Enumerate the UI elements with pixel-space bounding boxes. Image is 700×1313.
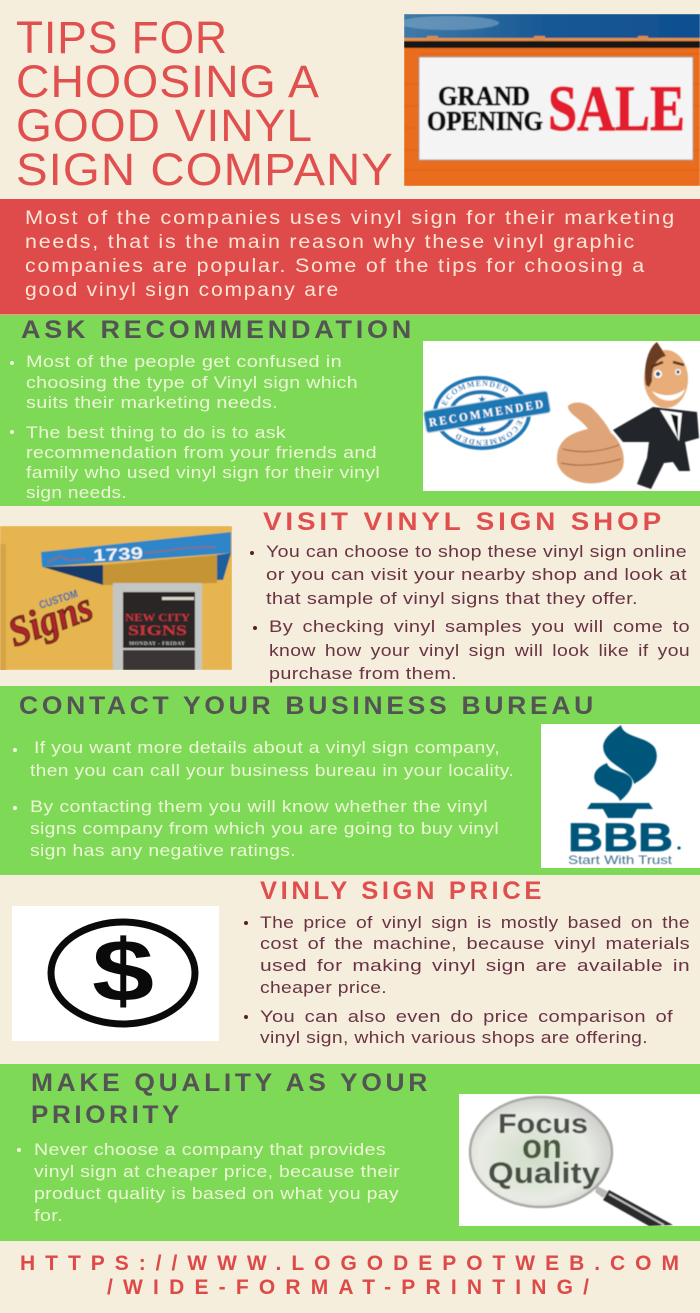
image: recommended stamp and thumbs up businessman: RECOMMENDED bbox=[440, 380, 509, 409]
bullet list: The best thing to do is to ask bbox=[26, 423, 286, 442]
heading: MAKE QUALITY AS YOUR bbox=[31, 1069, 431, 1097]
bullet list: sign needs. bbox=[26, 483, 127, 502]
heading: vinly sign price: VINLY SIGN PRICE bbox=[260, 877, 545, 905]
photo: grand opening sale banner: OPENING bbox=[427, 106, 543, 136]
introduction text: good vinyl sign company are bbox=[25, 280, 340, 301]
bullet list: vinyl sign at cheaper price, because their bbox=[34, 1162, 400, 1181]
bullet list: sign has any negative ratings. bbox=[30, 841, 296, 860]
title bbox=[16, 12, 394, 195]
panel: make quality as your priority bbox=[0, 1064, 700, 1241]
image: focus on quality magnifier: Focus bbox=[498, 1108, 588, 1139]
image: focus on quality magnifier: on bbox=[522, 1128, 562, 1166]
bullet list: visit vinyl sign shop bbox=[250, 542, 690, 683]
heading: ASK RECOMMENDATION bbox=[21, 316, 415, 344]
bullet list: suits their marketing needs. bbox=[26, 393, 278, 412]
bullet list: Never choose a company that provides bbox=[34, 1140, 386, 1159]
title: GOOD VINYL bbox=[16, 100, 313, 151]
bullet list: for. bbox=[34, 1206, 63, 1225]
heading: visit vinyl sign shop: VISIT VINYL SIGN SHOP bbox=[263, 508, 665, 536]
logo: BBB start with trust: Start With Trust bbox=[568, 853, 673, 867]
bullet list: Most of the people get confused in bbox=[26, 352, 342, 371]
photo: custom signs storefront bbox=[0, 526, 232, 670]
bullet list bbox=[17, 1140, 400, 1225]
image: recommended stamp and thumbs up businessman: RECOMMENDED bbox=[428, 396, 547, 430]
bullet list: visit vinyl sign shop: purchase from them. bbox=[269, 664, 457, 683]
introduction text: needs, that is the main reason why these vinyl graphic bbox=[25, 232, 636, 253]
bullet list: choosing the type of Vinyl sign which bbox=[26, 373, 358, 392]
bullet list: then you can call your business bureau in your locality. bbox=[30, 761, 514, 780]
bullet list: visit vinyl sign shop: You can choose to shop these vinyl sign online bbox=[266, 542, 687, 561]
bullet list: vinly sign price: used for making vinyl sign are available in bbox=[260, 956, 690, 975]
panel: introduction bbox=[0, 199, 700, 314]
image: recommended stamp and thumbs up businessman: RECOMMENDED bbox=[455, 416, 524, 446]
image: recommended stamp and thumbs up businessman bbox=[423, 341, 700, 491]
title: SIGN COMPANY bbox=[16, 144, 394, 195]
introduction text: Most of the companies uses vinyl sign for their marketing bbox=[25, 208, 676, 229]
bullet list: vinly sign price: cheaper price. bbox=[260, 978, 387, 997]
bullet list: family who used vinyl sign for their vinyl bbox=[26, 463, 380, 482]
bullet list: vinly sign price: The price of vinyl sign is mostly based on the bbox=[260, 913, 690, 932]
bullet list: vinly sign price: vinyl sign, which various shops are offering. bbox=[260, 1028, 648, 1047]
introduction text bbox=[25, 208, 676, 301]
logo: BBB start with trust: BBB bbox=[568, 816, 673, 860]
photo: grand opening sale banner: GRAND bbox=[438, 81, 530, 111]
photo: grand opening sale banner bbox=[399, 14, 700, 186]
image: focus on quality magnifier: Quality bbox=[488, 1157, 600, 1190]
image: recommended stamp and thumbs up businessman: ★ bbox=[477, 424, 487, 436]
bullet list: product quality is based on what you pay bbox=[34, 1184, 399, 1203]
photo: custom signs storefront: MONDAY - FRIDAY bbox=[129, 641, 185, 647]
image: dollar symbol bbox=[12, 906, 219, 1041]
introduction text: companies are popular. Some of the tips for choosing a bbox=[25, 256, 646, 277]
heading: CONTACT YOUR BUSINESS BUREAU bbox=[19, 692, 597, 720]
footer url bbox=[20, 1252, 685, 1299]
photo: custom signs storefront: Signs bbox=[2, 584, 99, 657]
image: focus on quality magnifier bbox=[459, 1094, 700, 1227]
image: dollar symbol: $ bbox=[92, 921, 154, 1020]
bullet list: vinly sign price: You can also even do price comparison of bbox=[260, 1007, 673, 1026]
photo: custom signs storefront: NEW CITY bbox=[125, 612, 190, 624]
bullet list: If you want more details about a vinyl sign company, bbox=[34, 738, 500, 757]
photo: custom signs storefront: CUSTOM bbox=[38, 588, 79, 612]
bullet list: visit vinyl sign shop: know how your vinyl sign will look like if you bbox=[269, 641, 690, 660]
bullet list: By contacting them you will know whether the vinyl bbox=[30, 797, 488, 816]
logo: BBB start with trust bbox=[541, 724, 700, 868]
bullet list bbox=[10, 352, 380, 502]
heading bbox=[31, 1069, 431, 1129]
panel: ask recommendation bbox=[0, 315, 700, 506]
panel: contact your business bureau bbox=[0, 686, 700, 875]
bullet list: vinly sign price bbox=[244, 913, 690, 1047]
bullet list: visit vinyl sign shop: or you can visit your nearby shop and look at bbox=[266, 565, 687, 584]
image: recommended stamp and thumbs up businessman: ★ bbox=[477, 394, 487, 406]
bullet list: visit vinyl sign shop: By checking vinyl samples you will come to bbox=[269, 617, 690, 636]
title: CHOOSING A bbox=[16, 56, 320, 107]
heading: PRIORITY bbox=[31, 1101, 183, 1129]
photo: custom signs storefront: SIGNS bbox=[128, 623, 187, 639]
bullet list: vinly sign price: cost of the machine, because vinyl materials bbox=[260, 934, 690, 953]
title: TIPS FOR bbox=[16, 12, 228, 63]
photo: custom signs storefront: 1739 bbox=[93, 544, 144, 565]
bullet list: signs company from which you are going to buy vinyl bbox=[30, 819, 499, 838]
footer url: HTTPS://WWW.LOGODEPOTWEB.COM bbox=[20, 1252, 685, 1275]
footer url: /WIDE-FORMAT-PRINTING/ bbox=[107, 1276, 595, 1299]
bullet list: visit vinyl sign shop: that sample of vinyl signs that they offer. bbox=[266, 589, 638, 608]
bullet list: recommendation from your friends and bbox=[26, 443, 377, 462]
bullet list bbox=[13, 738, 514, 860]
